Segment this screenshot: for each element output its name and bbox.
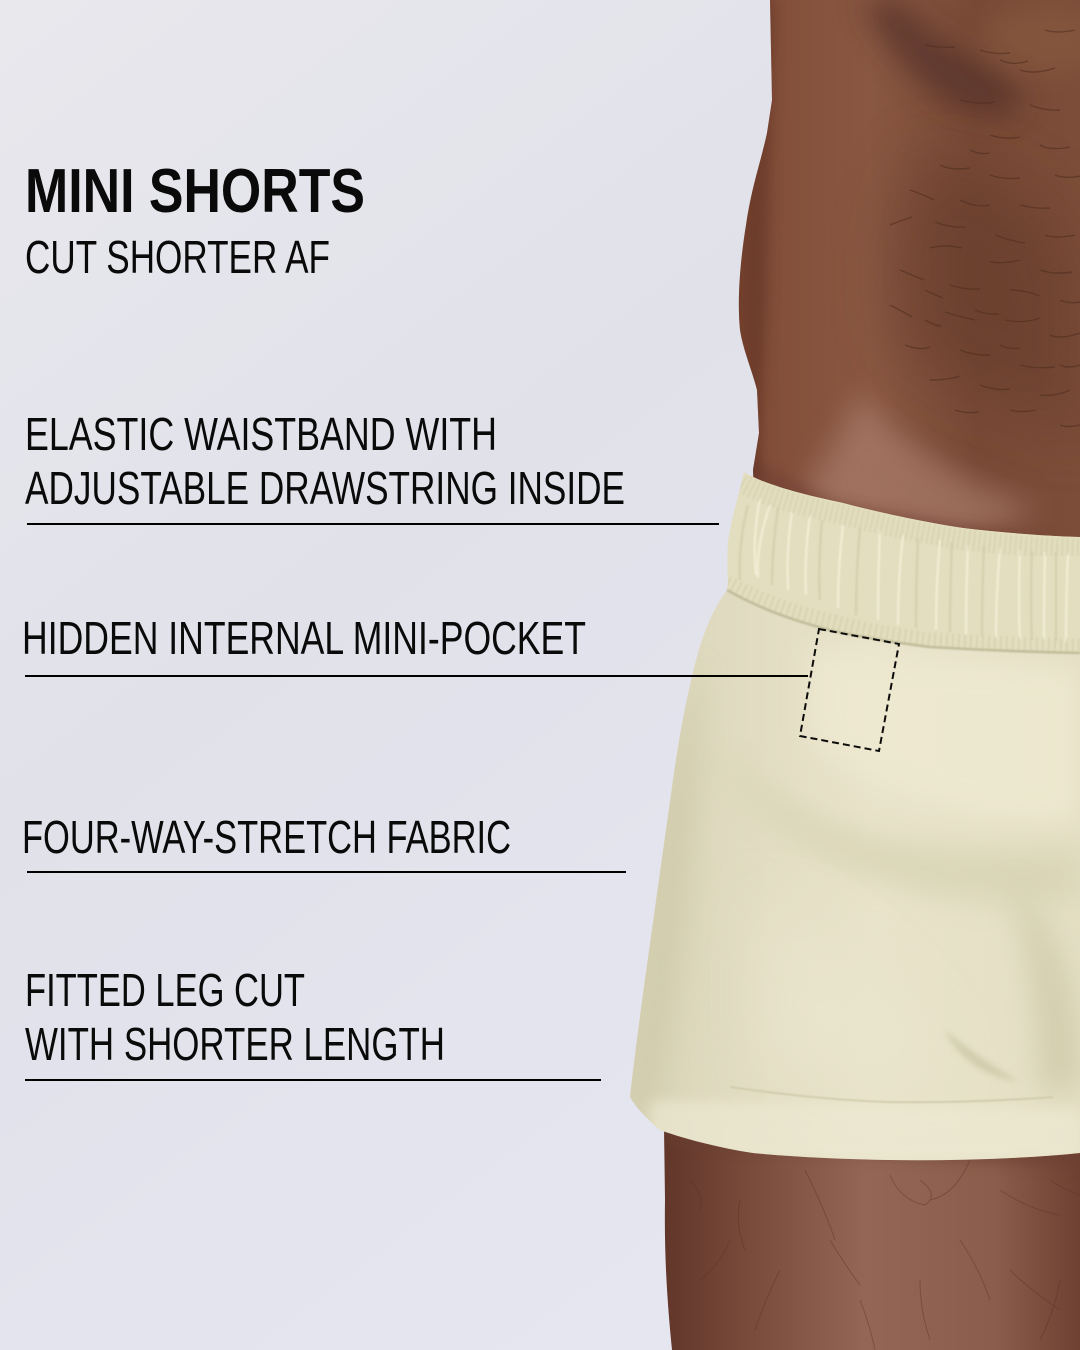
subtitle: CUT SHORTER AF: [25, 231, 330, 283]
callout: waistband: [25, 408, 719, 524]
hem stitch: [730, 1087, 1053, 1102]
torso: [738, 0, 1080, 537]
title: MINI SHORTS: [25, 157, 365, 226]
legs: [650, 1120, 1080, 1350]
waistband seam: [727, 590, 1080, 653]
waistband: [748, 474, 1076, 648]
callout: waistband: ADJUSTABLE DRAWSTRING INSIDE: [25, 462, 625, 514]
callout: waistband: ELASTIC WAISTBAND WITH: [25, 408, 497, 460]
waistband pleats: [755, 498, 1068, 642]
lower elastic ribs: [727, 583, 1080, 646]
torso hair: [890, 30, 1080, 426]
leg hair: [690, 1160, 1080, 1350]
shorts body: [620, 460, 1080, 1170]
fabric shading: [630, 728, 698, 1098]
callout: leg cut: WITH SHORTER LENGTH: [25, 1018, 445, 1070]
callout: leg cut: FITTED LEG CUT: [25, 964, 305, 1016]
upper elastic ribs: [742, 483, 1080, 549]
callout: pocket: HIDDEN INTERNAL MINI-POCKET: [22, 612, 586, 664]
dashed pocket outline: [800, 629, 899, 751]
callout: leg cut: [25, 964, 601, 1080]
photo: model wearing mini shorts: [620, 0, 1080, 1350]
callout: fabric: FOUR-WAY-STRETCH FABRIC: [22, 811, 511, 863]
